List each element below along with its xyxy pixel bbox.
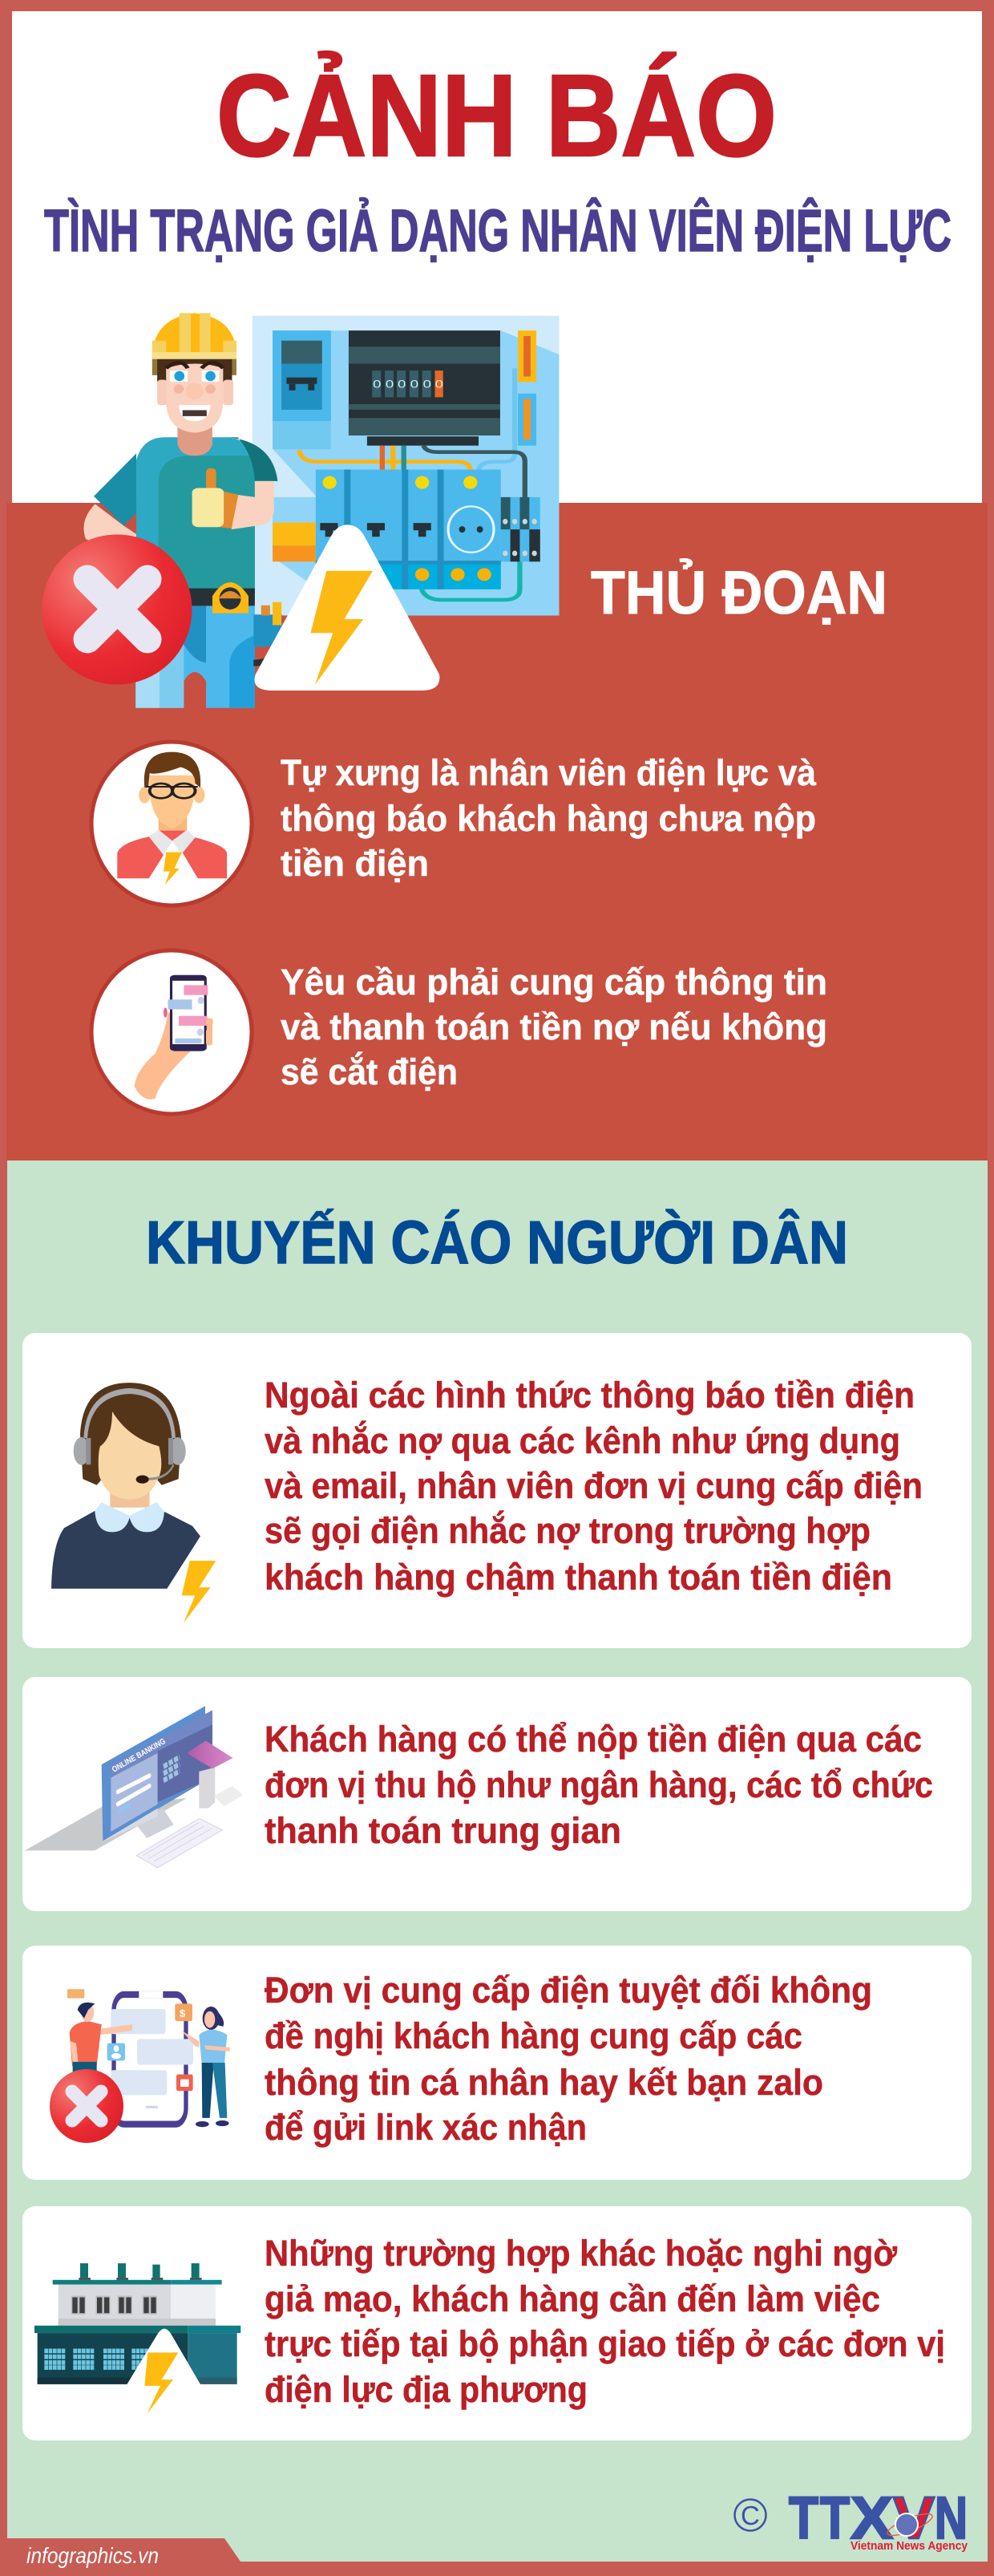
icon: operator with headset — [51, 1383, 216, 1623]
icon: copyright — [734, 2499, 766, 2531]
text: card 2: đơn vị thu hộ như ngân hàng, các tổ chức — [265, 1764, 933, 1805]
icon: electricity building — [34, 2263, 240, 2414]
text: card 1: sẽ gọi điện nhắc nợ trong trường hợp — [265, 1510, 871, 1551]
logo: TTXVN — [789, 2485, 968, 2553]
illustration: electrical panel: 0 — [386, 378, 394, 391]
logo: TTXVN: T — [789, 2485, 818, 2551]
illustration: electrical panel: 0 — [410, 378, 418, 391]
text: card 3: để gửi link xác nhận — [265, 2107, 587, 2148]
footer tab: infographics.vn — [26, 2543, 159, 2568]
text: card 1: và nhắc nợ qua các kênh như ứng dụng — [265, 1420, 900, 1461]
icon: online banking computer: ONLINE BANKING — [111, 1737, 168, 1775]
icon: red cross button small — [50, 2069, 123, 2143]
illustration: electrical panel: 0 — [434, 378, 443, 391]
card 4: local electricity office — [22, 2206, 972, 2440]
logo: TTXVN: V — [893, 2485, 935, 2551]
logo: TTXVN: X — [851, 2485, 893, 2551]
text: card 4: giả mạo, khách hàng cần đến làm việc — [265, 2278, 880, 2319]
text: card 3: Đơn vị cung cấp điện tuyệt đối không — [265, 1970, 872, 2011]
text: card 1: Ngoài các hình thức thông báo tiền điện — [265, 1375, 915, 1416]
text: card 1 — [265, 1375, 923, 1598]
icon: phone in hand circle — [91, 950, 252, 1114]
title: CẢNH BÁO — [216, 51, 777, 180]
text: card 1: khách hàng chậm thanh toán tiền điện — [265, 1557, 892, 1598]
panel: khuyến cáo green section — [7, 1160, 988, 2562]
icon: warning triangle with lightning bolt — [255, 525, 439, 691]
icon: red cross button — [42, 534, 192, 685]
text: thủ đoạn 1: Tự xưng là nhân viên điện lực và — [281, 752, 817, 793]
card 2: online banking — [22, 1677, 972, 1911]
text: thủ đoạn 1 — [281, 752, 817, 884]
illustration: electrical panel: 0 — [373, 378, 382, 391]
text: card 2: thanh toán trung gian — [265, 1810, 621, 1851]
icon: copyright: C — [741, 2501, 760, 2530]
icon: people and phone — [67, 1989, 230, 2127]
text: card 3: thông tin cá nhân hay kết bạn zalo — [265, 2062, 823, 2103]
text: thủ đoạn 1: tiền điện — [281, 843, 429, 884]
logo: TTXVN: T — [820, 2485, 850, 2551]
text: card 4: điện lực địa phương — [265, 2369, 588, 2410]
illustration: electrical panel: 0 — [422, 378, 431, 391]
text: card 2: Khách hàng có thể nộp tiền điện qua các — [265, 1719, 922, 1760]
text: card 1: và email, nhân viên đơn vị cung cấp điện — [265, 1465, 923, 1506]
logo: TTXVN: Vietnam News Agency — [851, 2539, 968, 2553]
text: card 2 — [265, 1719, 933, 1851]
text: card 4 — [265, 2233, 945, 2410]
heading: thủ đoạn: THỦ ĐOẠN — [591, 559, 887, 627]
footer tab — [7, 2538, 240, 2568]
card 1: call center — [22, 1333, 972, 1648]
panel: header white — [12, 11, 982, 503]
text: thủ đoạn 2: Yêu cầu phải cung cấp thông tin — [281, 962, 827, 1002]
text: thủ đoạn 2: sẽ cắt điện — [281, 1051, 458, 1092]
illustration: electrical panel: 0 — [398, 378, 406, 391]
card 3: no personal information — [22, 1946, 972, 2180]
text: thủ đoạn 1: thông báo khách hàng chưa nộp — [281, 798, 816, 839]
text: card 3: đề nghị khách hàng cung cấp các — [265, 2015, 802, 2056]
text: thủ đoạn 2: và thanh toán tiền nợ nếu không — [281, 1007, 827, 1047]
text: card 4: Những trường hợp khác hoặc nghi ngờ — [265, 2233, 897, 2274]
text: thủ đoạn 2 — [281, 962, 827, 1092]
illustration: electrician worker — [83, 313, 282, 708]
heading: khuyến cáo người dân: KHUYẾN CÁO NGƯỜI DÂN — [146, 1209, 848, 1276]
logo: TTXVN: N — [935, 2485, 968, 2551]
panel: thủ đoạn red section — [6, 503, 988, 1160]
icon: online banking computer — [25, 1706, 243, 1868]
text: card 4: trực tiếp tại bộ phận giao tiếp ở các đơn vị — [265, 2323, 945, 2364]
illustration: electrical panel — [253, 316, 559, 615]
icon: people and phone: $ — [180, 2007, 186, 2019]
text: card 3 — [265, 1970, 872, 2148]
icon: impersonator circle — [91, 742, 252, 905]
